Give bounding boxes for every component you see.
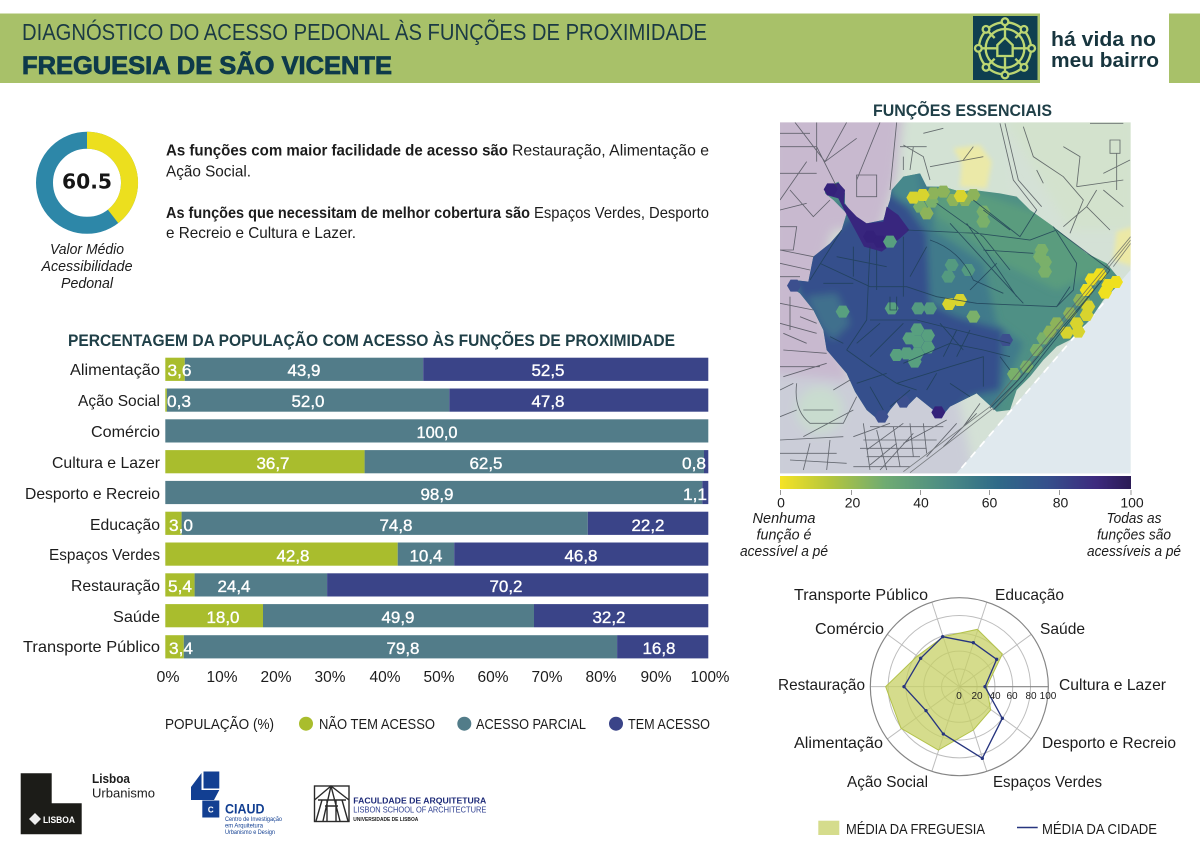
row: Desporto e Recreio: Desporto e Recreio [25,486,160,503]
radar category labels: Transporte Público [794,587,928,604]
radar category labels: Educação [995,587,1064,604]
row: Alimentação [70,358,708,381]
bar chart legend: TEM ACESSO [628,717,710,733]
row: Saúde: 18,0 [206,609,240,627]
map base terrain [770,110,1137,483]
row: Espaços Verdes: 10,4 [410,548,442,566]
stacked bar chart [23,358,730,686]
row: Educação: 3,0 [169,517,193,535]
row: Espaços Verdes: Espaços Verdes [49,547,160,564]
percentage axis: 60% [478,669,509,686]
row: Restauração: 70,2 [490,578,522,596]
radar scale numbers [956,691,1057,702]
row: Cultura e Lazer: 62,5 [470,455,502,473]
logo: Lisboa Urbanismo: LISBOA [43,815,75,826]
row: Ação Social: 47,8 [532,393,564,411]
donut indicator [44,140,130,225]
percentage axis: 40% [370,669,401,686]
row: Alimentação: 43,9 [288,362,320,380]
colour scale [777,476,1144,510]
logo: CIAUD [191,772,282,836]
row: Desporto e Recreio: 98,9 [420,486,454,504]
logo: ha vida no meu bairro [973,16,1159,80]
row: Desporto e Recreio [25,481,708,504]
radar chart [778,587,1176,791]
radar legend: MÉDIA DA FREGUESIA [846,821,985,838]
row: Transporte Público: 3,4 [169,640,193,658]
row: Saúde: 49,9 [382,609,414,627]
row: Espaços Verdes [49,542,708,566]
donut caption: Valor Médio [50,242,124,258]
logo: ha vida no meu bairro: meu bairro [1051,50,1159,72]
colour scale: 60 [982,494,997,510]
row: Educação: 74,8 [380,517,412,535]
row: Comércio: Comércio [91,424,160,441]
row: Educação: Educação [90,517,160,534]
logo: Lisboa Urbanismo: Urbanismo [92,786,155,800]
row: Espaços Verdes: 46,8 [564,548,598,566]
row: Transporte Público: Transporte Público [23,639,160,656]
scale caption: low [740,511,828,560]
row: Espaços Verdes: 42,8 [276,548,310,566]
row: Ação Social: 52,0 [292,393,324,411]
radar scale numbers: 0 [956,691,962,702]
percentage axis: 80% [586,669,617,686]
scale caption: high: funções são [1097,528,1171,544]
row: Alimentação: Alimentação [70,362,160,379]
row: Comércio [91,419,708,442]
logo: CIAUD: Centro de Investigação [225,816,282,823]
logo: Faculdade de Arquitetura: LISBON SCHOOL OF ARCHITECTURE [353,806,487,814]
bar chart heading: PERCENTAGEM DA POPULAÇÃO COM ACESSO ÀS FUNÇÕES DE PROXIMIDADE [68,330,675,350]
percentage axis: 50% [424,669,455,686]
row: Educação: 22,2 [632,517,664,535]
row: Alimentação: 3,6 [168,362,192,380]
donut indicator: 60.5 [62,170,112,194]
donut caption [41,242,132,292]
radar category labels: Saúde [1040,621,1085,638]
scale caption: low: função é [756,528,812,544]
scale caption: high: acessíveis a pé [1087,544,1181,560]
radar scale numbers: 20 [971,691,983,702]
radar category labels: Cultura e Lazer [1059,677,1167,694]
bar chart legend [165,716,710,733]
row: Transporte Público: 79,8 [386,640,420,658]
logo: CIAUD: em Arquitetura [225,822,263,829]
percentage axis: 30% [314,669,346,686]
radar category labels: Alimentação [794,735,883,752]
percentage axis: 100% [690,669,730,686]
percentage axis: 20% [260,669,292,686]
row: Cultura e Lazer [52,450,708,473]
radar category labels: Comércio [815,621,884,638]
row: Transporte Público: 16,8 [642,640,676,658]
map: accessibility hexagons [770,110,1137,483]
summary text: Espaços Verdes, Desporto [534,205,709,222]
radar category labels: Desporto e Recreio [1042,735,1176,752]
row: Ação Social: Ação Social [78,393,160,410]
row: Transporte Público [23,635,708,658]
row: Comércio: 100,0 [416,424,458,442]
scale caption: high [1087,511,1181,560]
row: Restauração: 5,4 [168,578,192,596]
logo: CIAUD: C [208,806,214,814]
scale caption: low: acessível a pé [740,544,828,560]
summary text: As funções com maior facilidade de acesso são [166,142,508,160]
logo: Lisboa Urbanismo [21,771,155,834]
row: Alimentação: 52,5 [532,362,564,380]
bar chart legend: POPULAÇÃO (%) [165,716,274,733]
summary text: Ação Social. [166,164,251,180]
map heading: FUNÇÕES ESSENCIAIS [873,100,1052,120]
radar scale numbers: 60 [1006,691,1018,702]
district base [797,173,1117,418]
logo: ha vida no meu bairro: há vida no [1051,29,1156,51]
radar legend: MÉDIA DA CIDADE [1042,821,1157,838]
row: Restauração [71,573,708,596]
row: Saúde [113,604,708,627]
logo: Faculdade de Arquitetura: UNIVERSIDADE DE LISBOA [353,817,419,823]
summary text: e Recreio e Cultura e Lazer. [166,225,356,242]
summary text: Restauração, Alimentação e [512,142,709,160]
series: média da cidade [902,635,1004,760]
row: Restauração: 24,4 [218,578,250,596]
series: média da freguesia [886,629,1002,750]
radar legend [818,821,1157,838]
radar category labels [778,587,1176,791]
title line 1: DIAGNÓSTICO DO ACESSO PEDONAL ÀS FUNÇÕES DE PROXIMIDADE [22,18,707,45]
title line 2: FREGUESIA DE SÃO VICENTE [22,50,392,80]
colour scale: 80 [1053,494,1068,510]
radar category labels: Ação Social [847,774,928,791]
row: Desporto e Recreio: 1,1 [683,486,707,504]
row: Cultura e Lazer: 0,8 [682,455,706,473]
colour scale: 0 [777,494,785,510]
percentage axis: 70% [532,669,563,686]
colour scale: 100 [1120,494,1144,510]
donut caption: Acessibilidade [41,259,132,275]
radar scale numbers: 100 [1040,691,1057,702]
radar rings and axes [870,598,1048,776]
darkest cluster [825,183,909,252]
logo: Faculdade de Arquitetura: FACULDADE DE ARQUITETURA [353,795,486,805]
street network [780,122,1131,473]
row: Restauração: Restauração [71,578,160,595]
summary text: As funções que necessitam de melhor cobertura são [166,205,530,222]
scale caption: low: Nenhuma [752,511,816,527]
hex clusters [787,183,1123,423]
row: Saúde: 32,2 [592,609,626,627]
percentage axis [156,669,730,686]
percentage axis: 0% [156,669,180,686]
row: Ação Social: 0,3 [167,393,191,411]
donut caption: Pedonal [61,276,114,292]
bar chart legend: NÃO TEM ACESSO [319,716,435,733]
logo: Faculdade de Arquitetura [314,786,487,823]
scale caption: high: Todas as [1106,511,1162,527]
row: Cultura e Lazer: 36,7 [256,455,290,473]
row: Cultura e Lazer: Cultura e Lazer [52,455,161,472]
row: Saúde: Saúde [113,609,160,626]
bar chart legend: ACESSO PARCIAL [476,717,586,733]
logo: CIAUD: CIAUD [225,801,265,816]
row: Educação [90,512,708,535]
logo: Lisboa Urbanismo: Lisboa [92,771,131,786]
radar category labels: Restauração [778,677,865,694]
logo: CIAUD: Urbanismo e Design [225,829,275,836]
radar category labels: Espaços Verdes [993,774,1102,791]
percentage axis: 10% [206,669,238,686]
percentage axis: 90% [640,669,672,686]
summary text [166,142,709,242]
radar scale numbers: 80 [1025,691,1037,702]
radar scale numbers: 40 [989,691,1001,702]
header band [0,14,1200,83]
row: Ação Social [78,388,708,412]
colour scale: 20 [845,494,860,510]
colour scale: 40 [913,494,929,510]
